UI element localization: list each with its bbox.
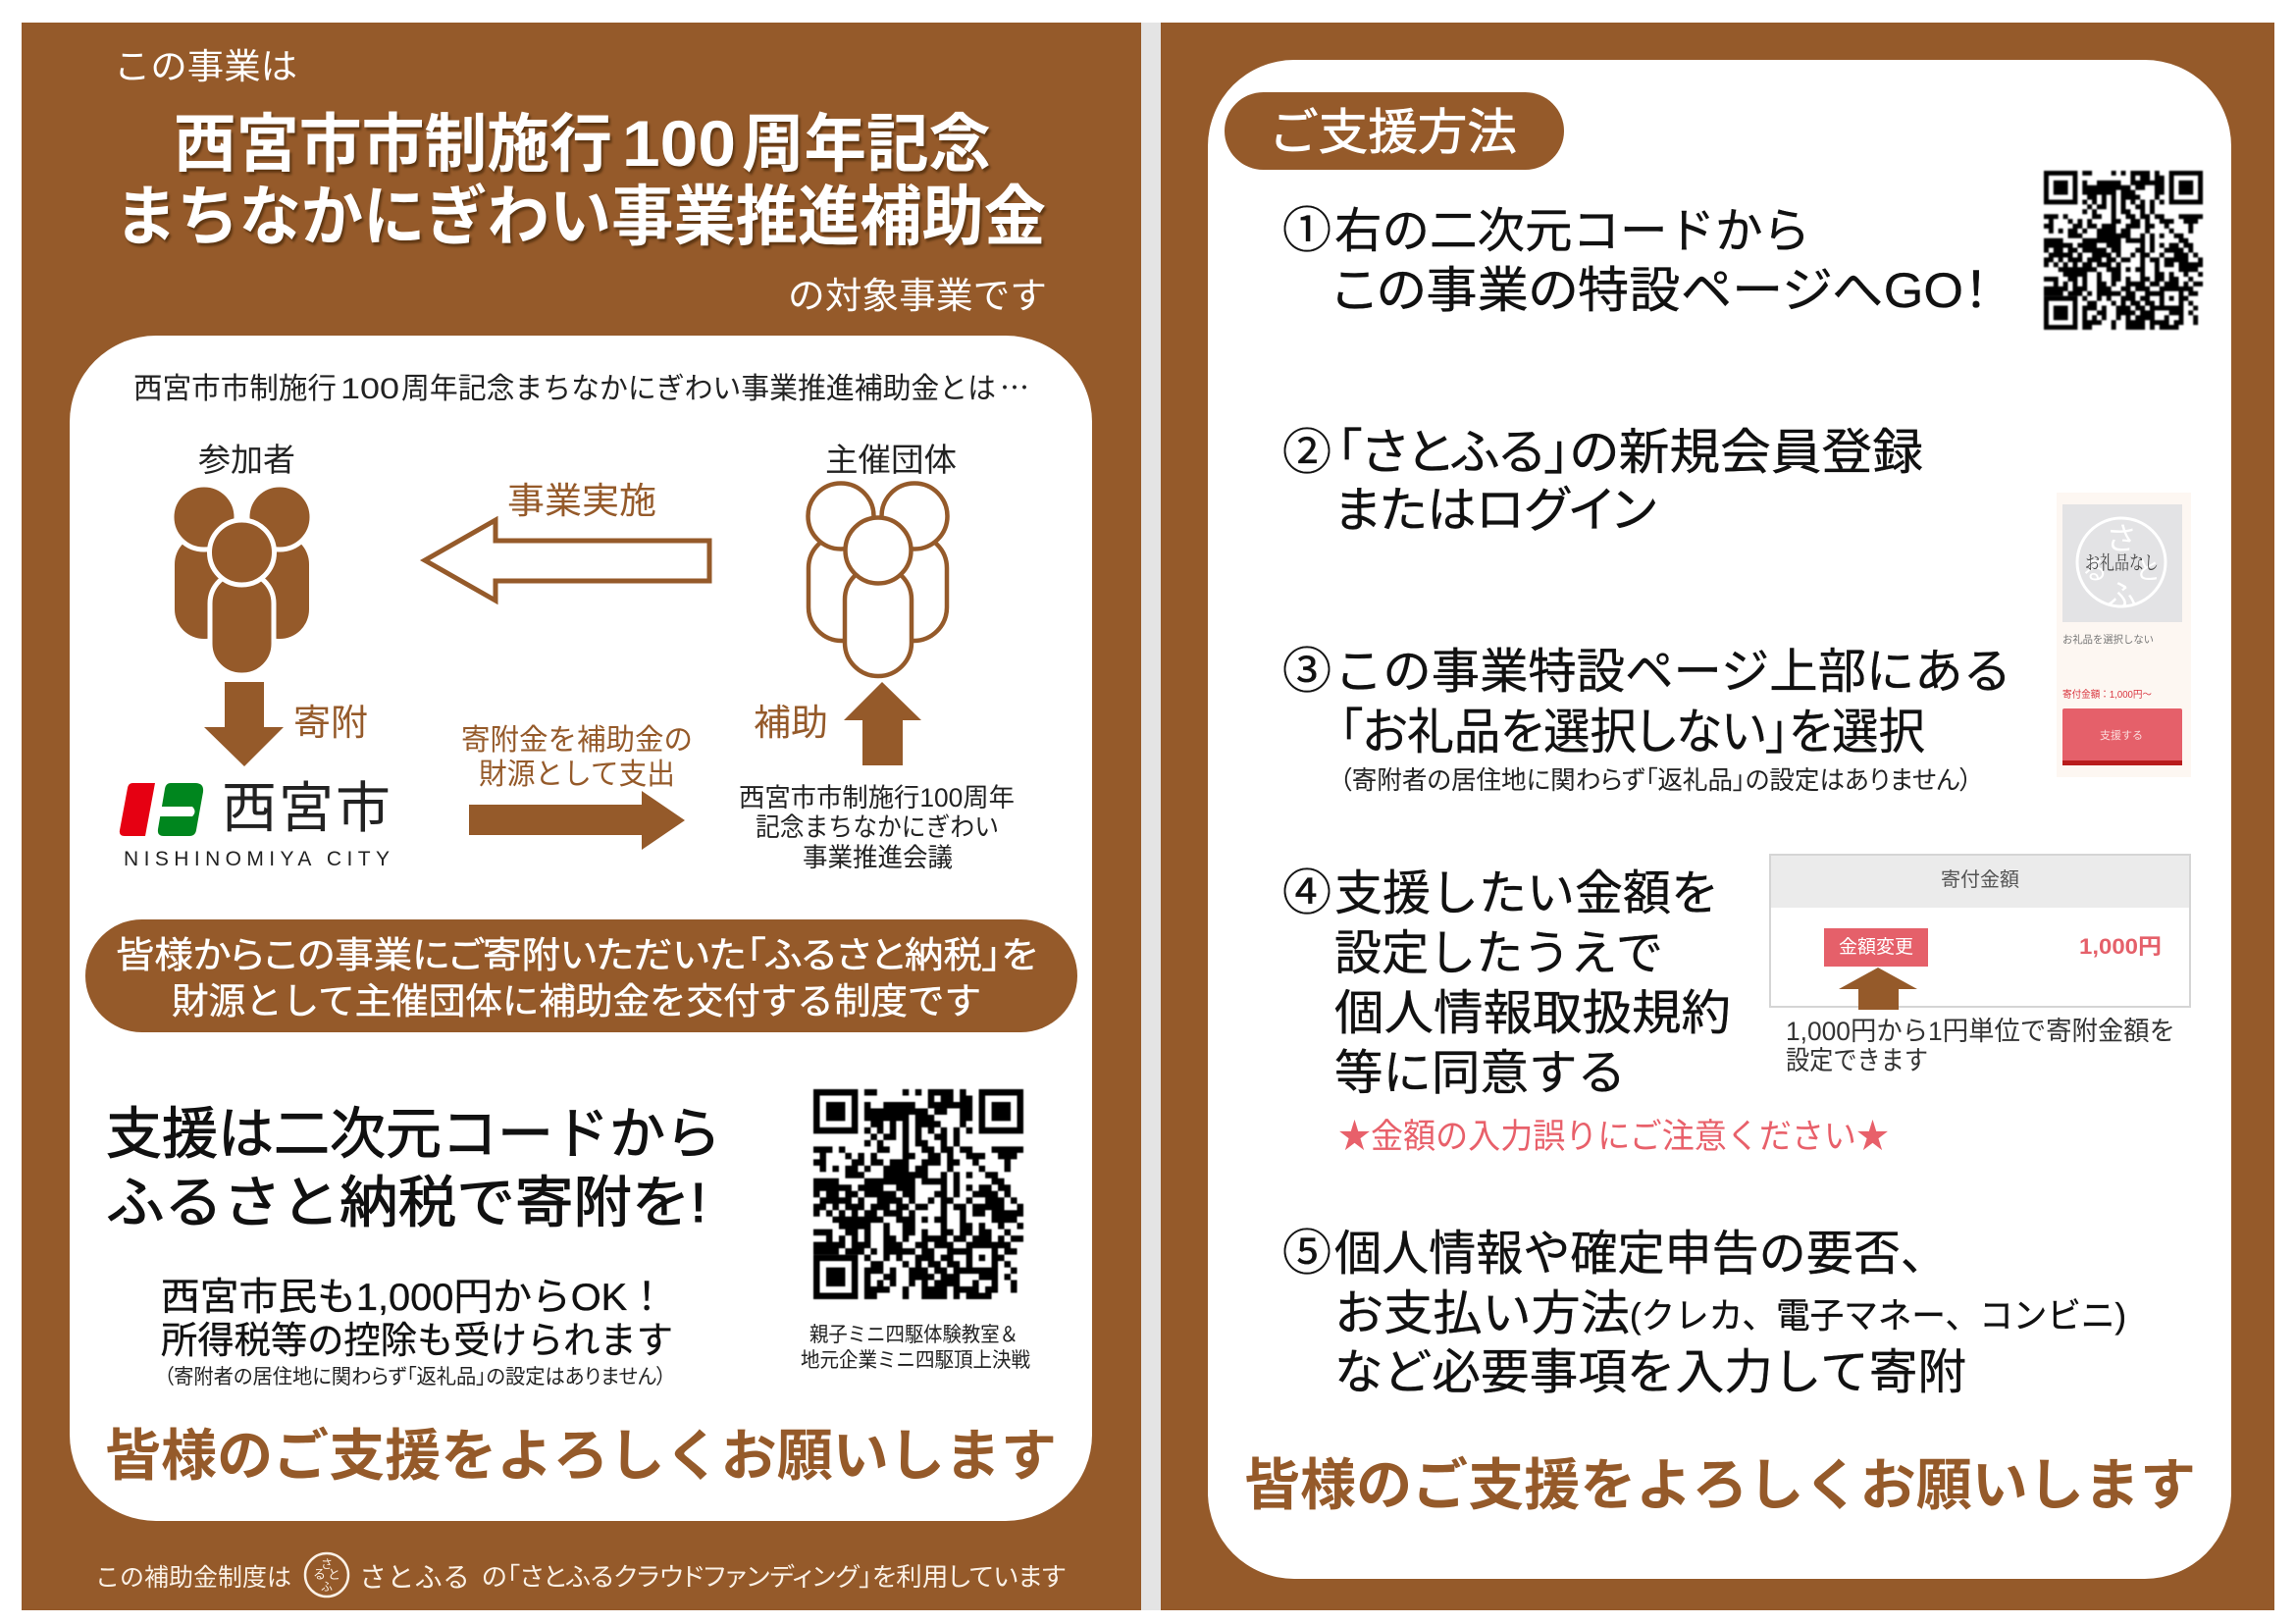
text: step 2: 「さとふる」の新規会員登録 [1336, 425, 1923, 480]
text: step 3: ③ [1282, 644, 1331, 699]
text: support details [161, 1277, 673, 1388]
text: amount note: 設定できます [1786, 1046, 1928, 1075]
text: amount note [1786, 1017, 2175, 1075]
heading: intro line: この事業は [114, 46, 297, 86]
arrow: change amount pointer [1839, 968, 1917, 1010]
callout: system description pill: 財源として主催団体に補助金を交付する制度です [172, 981, 981, 1022]
text: organizing committee name: 記念まちなかにぎわい [756, 812, 999, 842]
divider: grey gap between pages [1141, 23, 1161, 1610]
logo: satofull seal: と [328, 1567, 340, 1582]
text: step 2: ② [1282, 425, 1331, 480]
title: subsidy name: 西宮市市制施行 [174, 108, 612, 180]
text: support details: 西宮市民も1,000円からOK！ [161, 1277, 666, 1319]
text: donation used as subsidy funds [461, 724, 693, 791]
text: organizing committee name: 事業推進会議 [803, 843, 953, 872]
panel: left brown flyer page [22, 23, 1141, 1610]
icon: participants solid people group [172, 485, 312, 675]
text: closing request left: 皆様のご支援をよろしくお願いします [105, 1425, 1057, 1488]
arrow: implementation outlined left arrow [425, 520, 709, 601]
heading: support via QR code: ふるさと納税で寄附を! [106, 1172, 706, 1234]
label: participants: 参加者 [198, 442, 295, 478]
image: no-gift selection card: る [2082, 555, 2108, 585]
callout: system description pill: 皆様からこの事業にご寄附いただいた「ふるさと納税」を [116, 935, 1037, 975]
image: no-gift selection card: と [2135, 555, 2161, 585]
heading: how to support pill: ご支援方法 [1269, 105, 1517, 160]
image: donation amount form: 1,000円 [2079, 934, 2162, 959]
image: donation amount form [1770, 855, 2190, 1010]
footer: crowdfunding credit: の「さとふるクラウドファンディング」を利用しています [482, 1562, 1066, 1592]
text: step 1: 右の二次元コードから [1334, 205, 1810, 258]
text: organizing committee name: 西宮市市制施行100周年 [739, 783, 1015, 812]
footer: crowdfunding credit: さとふる [359, 1562, 470, 1593]
image: donation amount form: 金額変更 [1839, 936, 1913, 958]
text: step 4: 支援したい金額を [1334, 867, 1719, 920]
image: no-gift selection card: お礼品を選択しない [2062, 633, 2154, 646]
text: step 5: ⑤ [1282, 1226, 1331, 1281]
text: step 1 [1282, 203, 1989, 318]
text: step 1: ① [1282, 203, 1331, 258]
image: no-gift selection card [2057, 493, 2191, 777]
text: step 5 [1282, 1226, 2126, 1399]
text: step 5: お支払い方法 [1334, 1287, 1630, 1340]
text: closing request right: 皆様のご支援をよろしくお願いします [1244, 1454, 2196, 1517]
text: donation used as subsidy funds: 財源として支出 [479, 759, 675, 791]
text: step 4: ④ [1282, 865, 1331, 920]
heading: support via QR code: 支援は二次元コードから [106, 1103, 721, 1166]
heading: target project line: の対象事業です [788, 276, 1047, 316]
image: no-gift selection card: さ [2106, 521, 2137, 556]
text: step 3: （寄附者の居住地に関わらず「返礼品」の設定はありません） [1339, 765, 1972, 795]
logo: Nishinomiya City: 西宮市 [222, 777, 391, 839]
text: donation used as subsidy funds: 寄附金を補助金の [461, 724, 693, 757]
panel: right brown flyer page [1161, 23, 2274, 1610]
title: subsidy name: 周年記念 [742, 108, 991, 180]
logo: Nishinomiya City [120, 777, 391, 870]
text: explanation heading: 西宮市市制施行 [133, 373, 337, 405]
QR code: left [813, 1089, 1023, 1299]
arrow: subsidy up arrow [844, 682, 921, 765]
text: step 5: など必要事項を入力して寄附 [1334, 1346, 1966, 1399]
logo: satofull seal: ふ [321, 1580, 333, 1594]
arrow: donation down arrow [204, 682, 284, 766]
footer: crowdfunding credit: この補助金制度は [95, 1564, 291, 1592]
text: step 3: この事業特設ページ上部にある [1334, 646, 2011, 699]
text: step 4: 設定したうえで [1334, 927, 1663, 980]
title: subsidy name [115, 107, 1046, 254]
panel: left white content card [70, 336, 1092, 1521]
text: step 4: 等に同意する [1334, 1047, 1626, 1100]
label: organizer: 主催団体 [825, 442, 957, 478]
text: step 4: 個人情報取扱規約 [1334, 987, 1731, 1040]
QR code: right [2044, 171, 2203, 330]
text: explanation heading [133, 364, 1029, 407]
callout: system description pill [85, 919, 1077, 1032]
label: subsidy: 補助 [754, 703, 828, 743]
text: step 5: (クレカ、電子マネー、コンビニ) [1630, 1295, 2126, 1336]
text: QR caption: 地元企業ミニ四駆頂上決戦 [801, 1349, 1030, 1372]
logo: satofull seal [305, 1553, 348, 1597]
text: step 4 [1282, 865, 1731, 1100]
heading: how to support pill [1225, 92, 1564, 170]
image: no-gift selection card: ふ [2106, 578, 2137, 613]
panel: right white content card [1208, 60, 2231, 1579]
text: QR caption: 親子ミニ四駆体験教室＆ [809, 1324, 1018, 1346]
text: amount note: 1,000円から1円単位で寄附金額を [1786, 1017, 2175, 1046]
text: explanation heading: 周年記念まちなかにぎわい事業推進補助金とは [401, 373, 996, 405]
text: QR caption [801, 1324, 1030, 1372]
text: step 3: 「お礼品を選択しない」を選択 [1339, 705, 1925, 760]
logo: Nishinomiya City: NISHINOMIYA CITY [124, 848, 390, 870]
text: step 3 [1282, 644, 2011, 795]
image: no-gift selection card: 寄付金額：1,000円〜 [2062, 688, 2152, 701]
title: subsidy name: まちなかにぎわい事業推進補助金 [115, 181, 1046, 254]
text: explanation heading: … [1000, 364, 1029, 407]
text: organizing committee name [739, 783, 1015, 872]
arrow: funding right arrow [469, 791, 685, 850]
label: donation: 寄附 [293, 703, 368, 743]
heading: support via QR code [106, 1103, 721, 1234]
text: support details: 所得税等の控除も受けられます [161, 1321, 673, 1362]
text: step 5: 個人情報や確定申告の要否、 [1334, 1228, 1948, 1281]
footer: crowdfunding credit [95, 1553, 1066, 1597]
logo: satofull seal: る [313, 1567, 326, 1582]
text: amount input warning: ★金額の入力誤りにご注意ください★ [1338, 1118, 1889, 1156]
text: explanation heading: 100 [340, 373, 399, 405]
image: donation amount form: 寄付金額 [1941, 868, 2019, 891]
image: no-gift selection card: お礼品なし [2085, 552, 2159, 574]
label: project implementation: 事業実施 [507, 481, 656, 521]
text: support details: （寄附者の居住地に関わらず「返礼品」の設定はありません） [164, 1366, 666, 1388]
logo: satofull seal: さ [321, 1557, 333, 1571]
text: step 2: またはログイン [1334, 483, 1656, 538]
image: no-gift selection card: 支援する [2100, 728, 2143, 742]
text: step 2 [1282, 425, 1923, 538]
icon: organizer outlined people group [809, 483, 948, 676]
title: subsidy name: 100 [622, 107, 736, 180]
text: step 1: この事業の特設ページへGO！ [1332, 263, 1989, 318]
